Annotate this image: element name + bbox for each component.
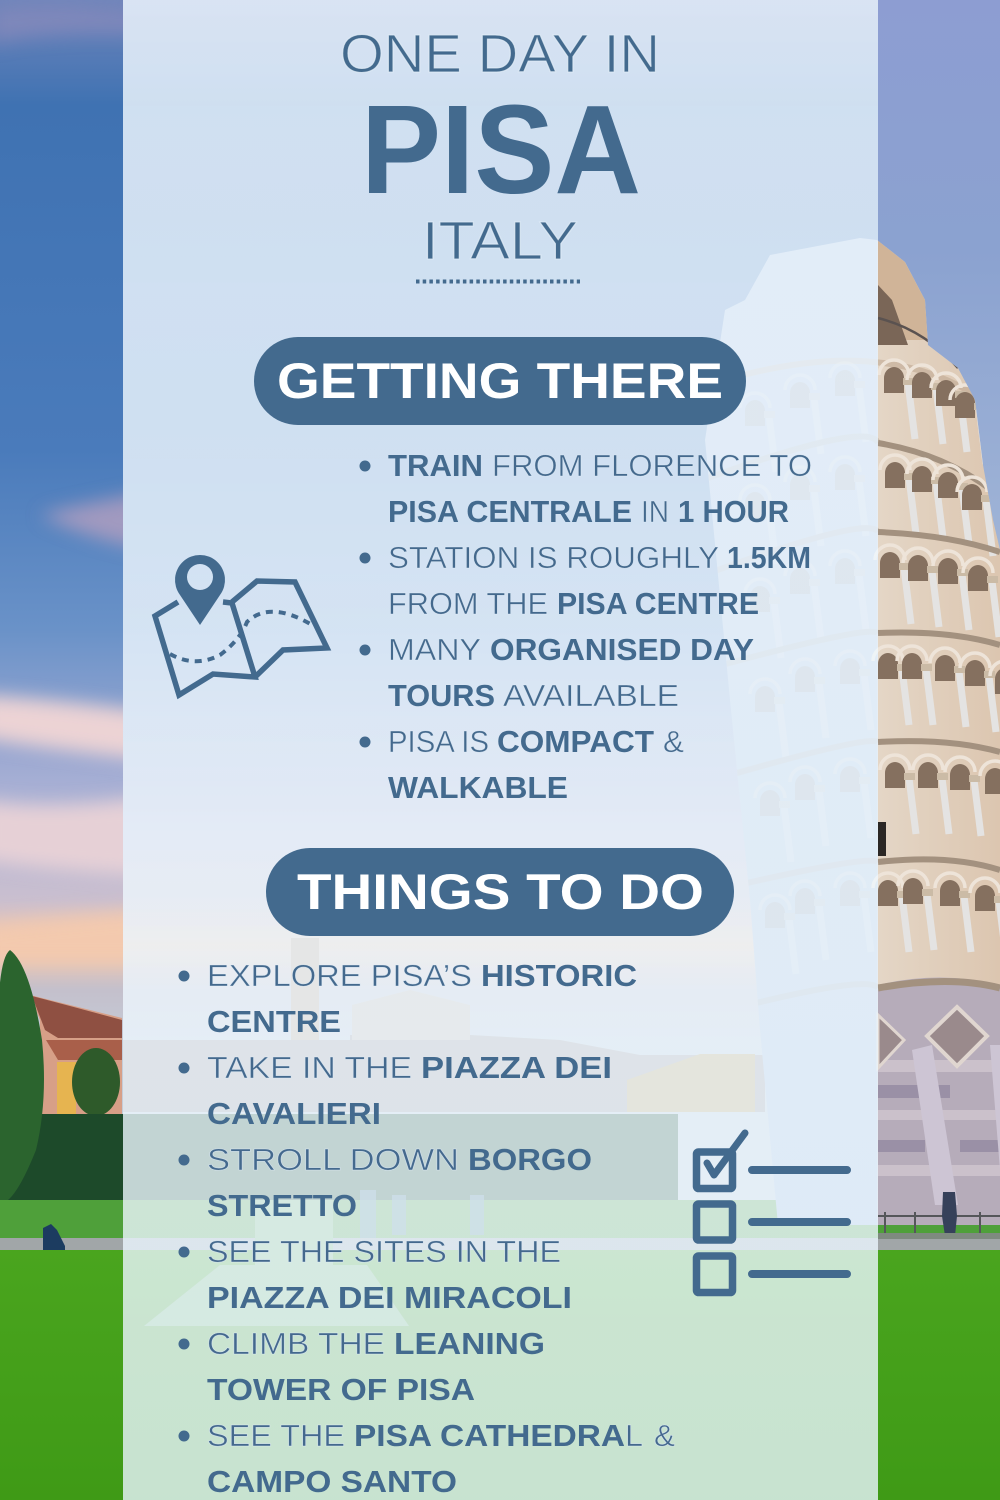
fence and visitors (878, 1212, 1000, 1234)
list: getting there: WALKABLE (388, 770, 568, 805)
title (340, 24, 660, 271)
list: things to do: LEANING (394, 1326, 545, 1361)
list: getting there: PISA CENTRE (557, 586, 759, 621)
list: getting there: MANY (388, 632, 481, 667)
list: getting there: ORGANISED DAY (490, 632, 754, 667)
list: getting there: COMPACT (497, 724, 654, 759)
list: getting there: IN (641, 494, 669, 529)
list: things to do: PIAZZA DEI (421, 1050, 612, 1085)
list: getting there: TRAIN (388, 448, 483, 483)
title: ONE DAY IN (340, 24, 660, 84)
arcades (873, 360, 1000, 988)
list: getting there: PISA IS (388, 724, 489, 759)
list: things to do: STROLL DOWN (207, 1142, 459, 1177)
icon: checklist (696, 1133, 847, 1292)
list: things to do: TAKE IN THE (207, 1050, 412, 1085)
top belvedere (878, 240, 928, 340)
list: getting there: 1.5KM (727, 540, 811, 575)
list: things to do: STRETTO (207, 1188, 357, 1223)
list: things to do: PIAZZA DEI MIRACOLI (207, 1280, 572, 1315)
list: things to do: L (625, 1418, 643, 1453)
title: PISA (361, 79, 641, 220)
list: things to do: CAMPO SANTO (207, 1464, 457, 1499)
heading pill: things to do (266, 848, 734, 936)
list: getting there: 1 HOUR (678, 494, 789, 529)
list: things to do: CAVALIERI (207, 1096, 381, 1131)
list: getting there: & (663, 724, 684, 759)
list: getting there: FROM THE (388, 586, 548, 621)
list: getting there: FROM FLORENCE TO (492, 448, 812, 483)
title: ITALY (422, 211, 578, 271)
list: things to do: CLIMB THE (207, 1326, 385, 1361)
list: things to do: SEE THE (207, 1418, 345, 1453)
list: things to do: TOWER OF PISA (207, 1372, 475, 1407)
list: things to do: HISTORIC (481, 958, 637, 993)
list: things to do: BORGO (468, 1142, 592, 1177)
distant buildings (30, 938, 765, 1118)
icon: map with location pin (155, 555, 327, 695)
tower (700, 230, 1000, 1230)
list: getting there: TOURS (388, 678, 495, 713)
faint arcades under the panel (745, 370, 880, 984)
hedge and lawn (5, 1114, 678, 1200)
list: getting there: PISA CENTRALE (388, 494, 632, 529)
list: getting there: STATION IS ROUGHLY (388, 540, 719, 575)
list: things to do: EXPLORE PISA’S (207, 958, 472, 993)
list: things to do: CENTRE (207, 1004, 341, 1039)
heading pill: getting there: GETTING THERE (277, 353, 723, 409)
list: getting there (360, 448, 812, 805)
heading pill: things to do: THINGS TO DO (297, 864, 704, 920)
translucent content panel (123, 0, 878, 1500)
list: getting there: AVAILABLE (503, 678, 679, 713)
dotted title divider (416, 280, 580, 284)
list: things to do: SEE THE SITES IN THE (207, 1234, 561, 1269)
list: things to do: & (654, 1418, 675, 1453)
clouds (0, 4, 123, 970)
list: things to do: PISA CATHEDRA (354, 1418, 625, 1453)
heading pill: getting there (254, 337, 746, 425)
list: things to do (178, 958, 675, 1499)
